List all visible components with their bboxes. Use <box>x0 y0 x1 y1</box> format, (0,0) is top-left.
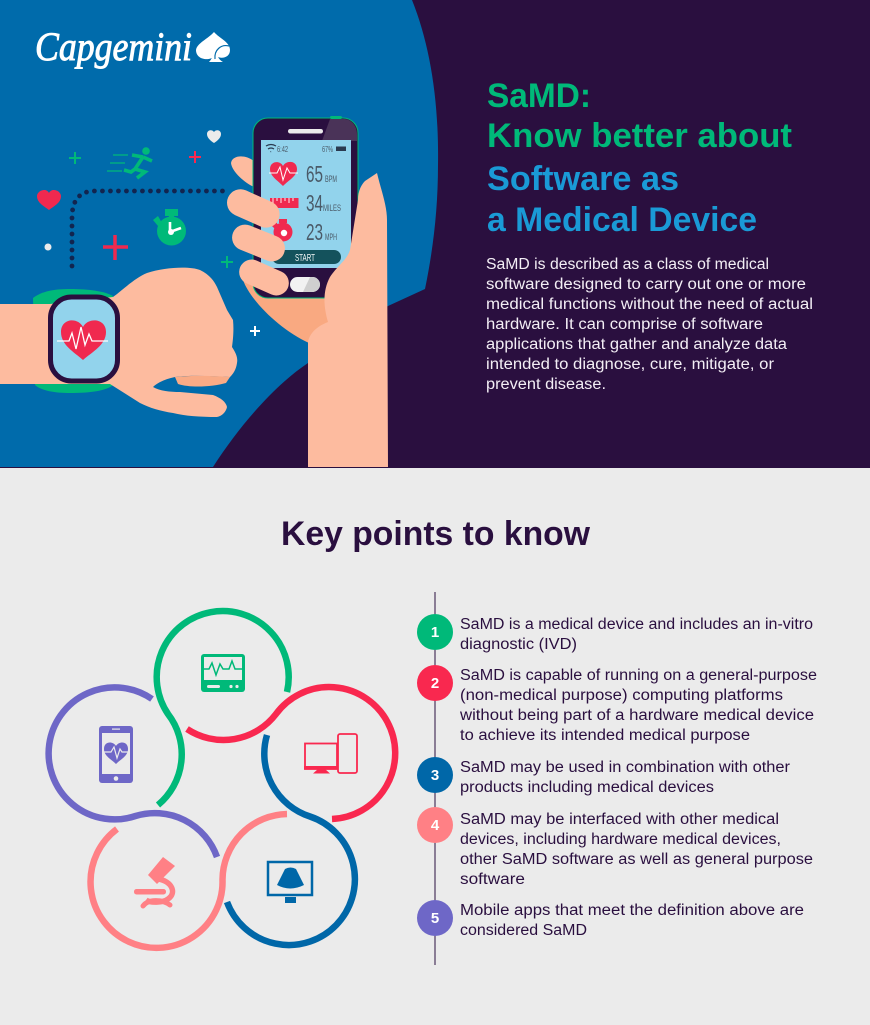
ring: red <box>187 687 395 819</box>
key point 1 <box>417 614 813 653</box>
logo: Capgemini: Capgemini <box>35 24 192 69</box>
main title <box>487 77 792 239</box>
main title: Know better about <box>487 117 792 155</box>
distance row <box>270 190 341 216</box>
key point 4: software <box>460 871 525 888</box>
speed row: MPH <box>325 232 337 243</box>
status bar: 6:42 <box>277 144 288 154</box>
icon: runner <box>107 147 152 178</box>
icon: small plus signs <box>69 151 260 336</box>
watch face <box>50 297 118 381</box>
watch band <box>33 289 113 393</box>
key point 3 <box>417 757 790 796</box>
key point 4 <box>417 807 813 888</box>
icon: heart with pulse <box>61 320 106 360</box>
intro paragraph: prevent disease. <box>486 376 606 393</box>
wrist hand <box>0 268 237 417</box>
thumb shadow <box>175 376 230 387</box>
timeline <box>434 592 436 965</box>
intro paragraph <box>486 256 813 393</box>
key point 1: 1 <box>431 624 439 641</box>
watch <box>50 297 118 381</box>
phone <box>253 116 358 298</box>
key point 5: Mobile apps that meet the definition above are <box>460 902 804 919</box>
intro paragraph: software designed to carry out one or more <box>486 276 806 293</box>
key point 2: without being part of a hardware medical device <box>459 707 814 724</box>
phone body <box>253 118 358 298</box>
palm behind phone <box>243 280 332 343</box>
speed row <box>272 219 337 245</box>
heart rate row: 65 <box>306 161 323 187</box>
icon: microscope <box>134 857 175 906</box>
speed row: 23 <box>306 219 323 245</box>
key point 2: (non-medical purpose) computing platforms <box>460 687 783 704</box>
interlocking rings diagram <box>49 611 395 948</box>
icon: stopwatch <box>153 209 186 246</box>
intro paragraph: intended to diagnose, cure, mitigate, or <box>486 356 774 373</box>
key point 2 <box>417 665 817 744</box>
key point 5: considered SaMD <box>460 922 587 939</box>
home button <box>290 277 320 292</box>
key point 4: devices, including hardware medical devices, <box>460 831 781 848</box>
upper finger <box>231 156 254 187</box>
intro paragraph: SaMD is described as a class of medical <box>486 256 769 273</box>
key point 5: 5 <box>431 910 439 927</box>
key point 1: diagnostic (IVD) <box>460 636 577 653</box>
main title: SaMD: <box>487 77 591 115</box>
gripping fingers <box>223 185 293 299</box>
key point 2: to achieve its intended medical purpose <box>460 727 750 744</box>
intro paragraph: applications that gather and analyze data <box>486 336 787 353</box>
phone screen <box>261 140 351 268</box>
main title: a Medical Device <box>487 201 757 239</box>
key point 4: other SaMD software as well as general purpose <box>460 851 813 868</box>
start button: START <box>295 253 315 264</box>
heart rate row: BPM <box>325 174 337 185</box>
key point 1: SaMD is a medical device and includes an in-vitro <box>460 616 813 633</box>
main title: Software as <box>487 160 679 198</box>
key point 2: 2 <box>431 675 439 692</box>
icon: hearts and dot <box>37 130 221 250</box>
key point 4: 4 <box>431 817 440 834</box>
key point 4: SaMD may be interfaced with other medical <box>460 811 779 828</box>
key point 3: 3 <box>431 767 439 784</box>
heart rate row <box>269 161 337 187</box>
key point 5 <box>417 900 804 939</box>
heading: key points: Key points to know <box>281 515 591 553</box>
dotted path <box>72 191 227 266</box>
ring: green <box>157 611 289 805</box>
distance row: 34 <box>306 190 323 216</box>
start button <box>272 250 341 264</box>
key point 3: products including medical devices <box>460 779 714 796</box>
ring: coral <box>91 814 287 948</box>
status bar: 67% <box>322 144 333 154</box>
distance row: MILES <box>323 203 341 214</box>
ring: blue <box>227 735 355 945</box>
holding hand and forearm <box>308 173 388 467</box>
icon: patient monitor <box>201 654 245 692</box>
intro paragraph: hardware. It can comprise of software <box>486 316 763 333</box>
icon: smartphone with heart <box>99 726 133 783</box>
ring: purple <box>49 687 217 857</box>
icon: ultrasound monitor <box>268 862 312 903</box>
status bar <box>266 144 346 154</box>
blue background shape <box>0 0 438 467</box>
key point 3: SaMD may be used in combination with other <box>460 759 790 776</box>
icon: desktop and tablet <box>304 734 357 774</box>
intro paragraph: medical functions without the need of actual <box>486 296 813 313</box>
key point 2: SaMD is capable of running on a general-purpose <box>460 667 817 684</box>
